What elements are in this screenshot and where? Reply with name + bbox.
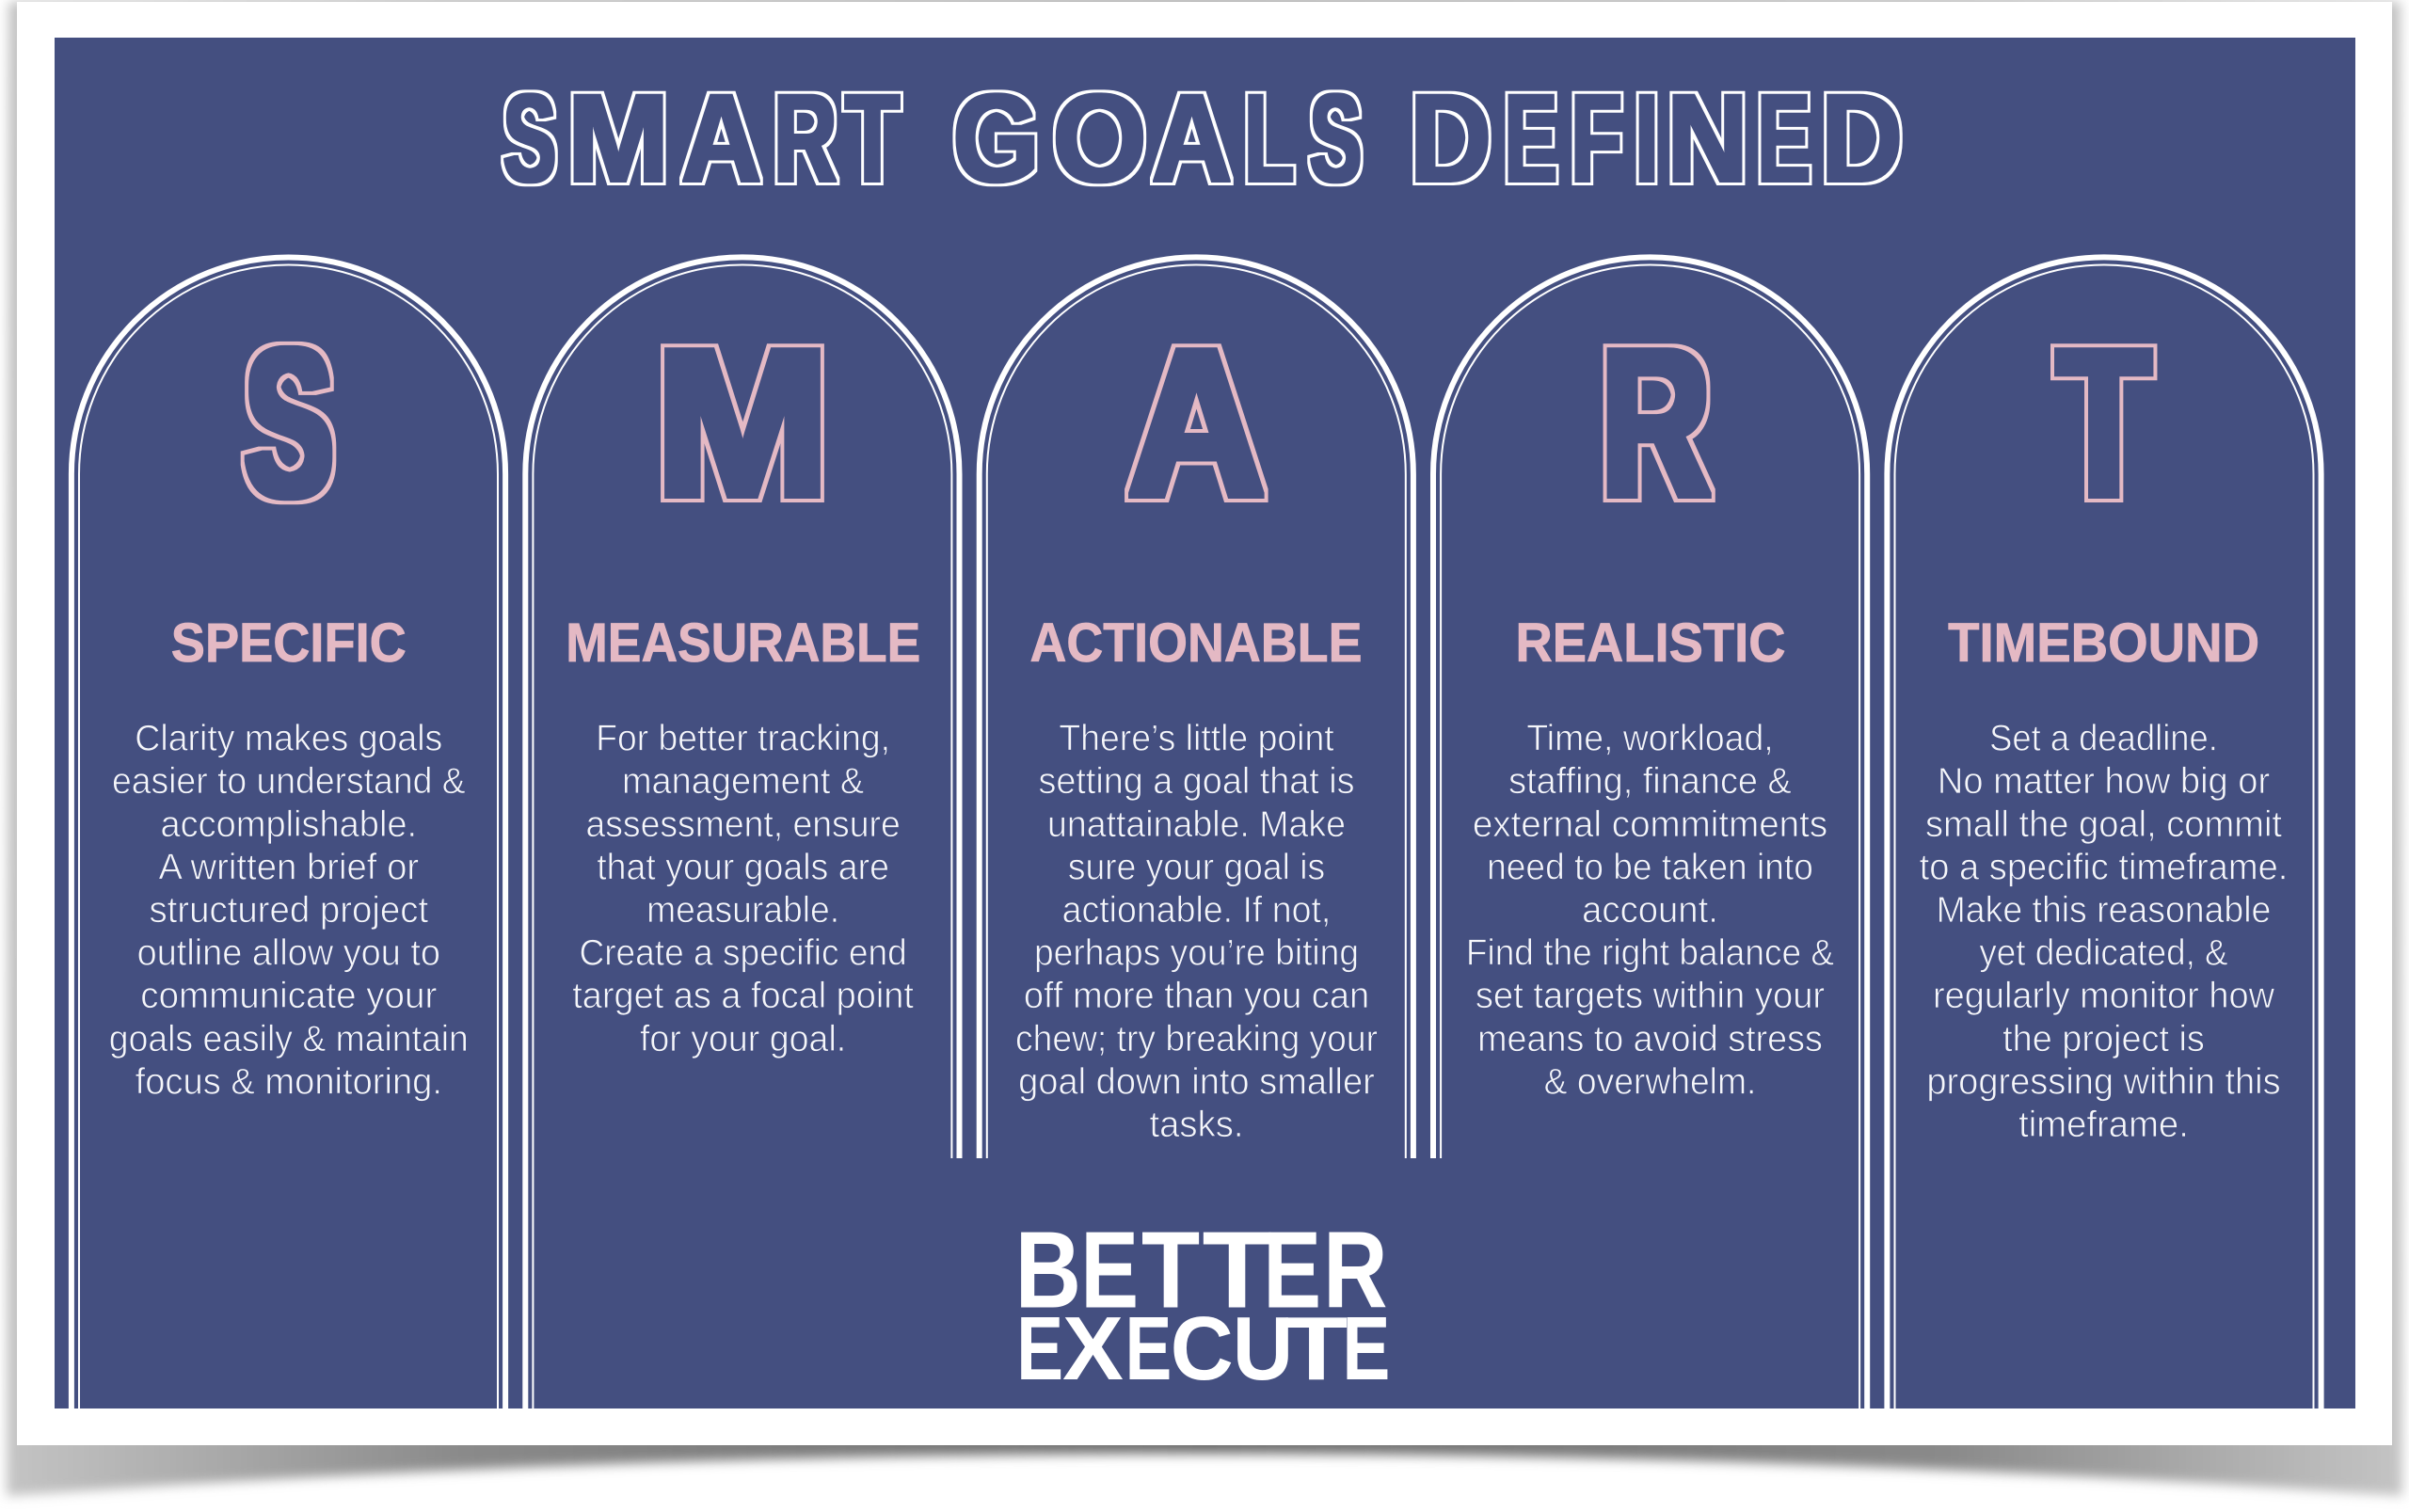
- title: M: [567, 69, 669, 209]
- body text: timebound: No matter how big or: [1938, 761, 2270, 802]
- title: S: [1310, 69, 1362, 209]
- logo: better execute: E: [1342, 1298, 1390, 1399]
- logo: better execute: T: [1203, 1208, 1272, 1330]
- title: R: [774, 69, 837, 209]
- body text: measurable: that your goals are: [597, 847, 889, 887]
- body text: specific: outline allow you to: [137, 933, 440, 974]
- body text: timebound: to a specific timeframe.: [1920, 847, 2288, 887]
- logo: better execute: E: [1125, 1298, 1172, 1399]
- body text: specific: communicate your: [140, 976, 437, 1016]
- title: N: [1667, 69, 1748, 209]
- title: A: [1152, 69, 1232, 209]
- title: E: [1758, 69, 1811, 209]
- body text: specific: easier to understand &: [112, 761, 466, 802]
- body text: timebound: Make this reasonable: [1937, 890, 2271, 931]
- arch: specific: [72, 258, 505, 1409]
- large letter A: A: [1128, 304, 1265, 541]
- title: D: [1821, 69, 1903, 209]
- body text: measurable: For better tracking,: [596, 719, 890, 759]
- logo: better execute: E: [1080, 1208, 1139, 1330]
- body text: realistic: means to avoid stress: [1477, 1019, 1823, 1059]
- logo: better execute: B: [1015, 1208, 1081, 1330]
- logo: better execute: R: [1323, 1208, 1387, 1330]
- body text: specific: [109, 719, 469, 1102]
- body text: timebound: the project is: [2002, 1019, 2205, 1059]
- body text: timebound: regularly monitor how: [1933, 976, 2275, 1016]
- heading: timebound: TIMEBOUND: [1948, 613, 2259, 674]
- body text: realistic: [1466, 719, 1834, 1102]
- title: A: [681, 69, 761, 209]
- heading: realistic: REALISTIC: [1515, 613, 1786, 674]
- large letter M: M: [655, 304, 830, 541]
- title: E: [1505, 69, 1557, 209]
- title: T: [845, 69, 900, 209]
- logo: better execute: T: [1285, 1298, 1348, 1399]
- logo: better execute: E: [1263, 1208, 1321, 1330]
- body text: specific: structured project: [149, 890, 428, 931]
- logo: better execute: T: [1141, 1208, 1200, 1330]
- body text: timebound: progressing within this: [1926, 1061, 2281, 1102]
- body text: timebound: Set a deadline.: [1989, 719, 2218, 759]
- body text: measurable: assessment, ensure: [585, 804, 901, 845]
- body text: measurable: [572, 719, 914, 1059]
- body text: actionable: unattainable. Make: [1047, 804, 1346, 845]
- body text: specific: A written brief or: [158, 847, 419, 887]
- heading: measurable: MEASURABLE: [566, 613, 920, 674]
- body text: timebound: timeframe.: [2018, 1105, 2189, 1145]
- body text: realistic: set targets within your: [1476, 976, 1825, 1016]
- body text: realistic: Time, workload,: [1526, 719, 1774, 759]
- body text: measurable: measurable.: [646, 890, 839, 931]
- large letter R: R: [1602, 304, 1710, 541]
- body text: actionable: setting a goal that is: [1039, 761, 1355, 802]
- body text: specific: Clarity makes goals: [135, 719, 442, 759]
- body text: realistic: & overwhelm.: [1544, 1061, 1756, 1102]
- title: L: [1244, 69, 1294, 209]
- title: I: [1635, 69, 1658, 209]
- body text: timebound: yet dedicated, &: [1979, 933, 2228, 974]
- title: S: [503, 69, 556, 209]
- body text: actionable: There’s little point: [1059, 719, 1334, 759]
- heading: specific: SPECIFIC: [171, 613, 407, 674]
- heading: actionable: ACTIONABLE: [1029, 613, 1363, 674]
- body text: measurable: for your goal.: [640, 1019, 846, 1059]
- arch: actionable: [980, 257, 1413, 1158]
- title: G: [953, 69, 1040, 209]
- body text: actionable: sure your goal is: [1068, 847, 1325, 887]
- body text: actionable: perhaps you’re biting: [1034, 933, 1359, 974]
- body text: realistic: account.: [1582, 890, 1718, 931]
- body text: measurable: target as a focal point: [572, 976, 914, 1016]
- logo: better execute: [1015, 1208, 1390, 1399]
- body text: actionable: chew; try breaking your: [1015, 1019, 1378, 1059]
- arch: timebound: [1887, 257, 2321, 1409]
- body text: timebound: [1920, 719, 2288, 1145]
- logo: better execute: E: [1016, 1298, 1063, 1399]
- body text: specific: goals easily & maintain: [109, 1019, 469, 1059]
- logo: better execute: X: [1062, 1298, 1124, 1399]
- large letter S: S: [246, 304, 333, 541]
- logo: better execute: C: [1171, 1298, 1234, 1399]
- body text: realistic: staffing, finance &: [1508, 761, 1792, 802]
- arch: realistic: [1433, 257, 1867, 1409]
- arch: measurable: [525, 257, 960, 1409]
- title: D: [1410, 69, 1492, 209]
- body text: actionable: actionable. If not,: [1062, 890, 1331, 931]
- body text: realistic: need to be taken into: [1487, 847, 1813, 887]
- body text: measurable: Create a specific end: [579, 933, 907, 974]
- body text: specific: focus & monitoring.: [136, 1061, 442, 1102]
- body text: actionable: off more than you can: [1024, 976, 1369, 1016]
- body text: actionable: goal down into smaller: [1018, 1061, 1375, 1102]
- title: F: [1571, 69, 1622, 209]
- body text: measurable: management &: [622, 761, 864, 802]
- body text: realistic: Find the right balance &: [1466, 933, 1834, 974]
- body text: actionable: [1015, 719, 1378, 1145]
- body text: timebound: small the goal, commit: [1925, 804, 2282, 845]
- body text: realistic: external commitments: [1473, 804, 1827, 845]
- body text: actionable: tasks.: [1150, 1105, 1244, 1145]
- large letter T: T: [2057, 304, 2150, 541]
- body text: specific: accomplishable.: [160, 804, 417, 845]
- logo: better execute: U: [1233, 1298, 1293, 1399]
- title: O: [1052, 69, 1147, 209]
